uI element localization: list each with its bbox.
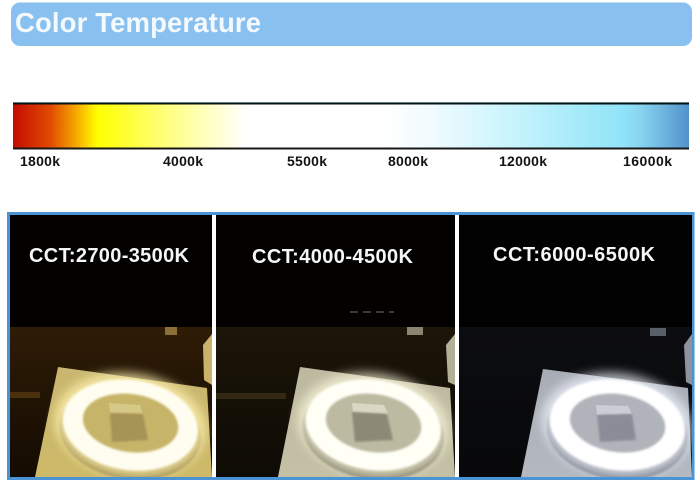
spectrum scale labels: 8000k [388, 153, 428, 169]
CCT label: 6000-6500K: CCT:6000-6500K [493, 244, 656, 266]
title: Color Temperature [15, 7, 261, 38]
color temperature spectrum bar [13, 102, 689, 150]
spectrum scale labels: 5500k [287, 153, 327, 169]
panel: neutral white 4000-4500K [216, 215, 456, 485]
spectrum scale labels: 16000k [623, 153, 672, 169]
panel: warm white 2700-3500K [10, 215, 213, 485]
panel: cool white 6000-6500K [459, 215, 700, 485]
title banner [11, 2, 692, 46]
spectrum scale labels: 12000k [499, 153, 547, 169]
spectrum scale labels: 1800k [20, 153, 60, 169]
CCT label: 4000-4500K: CCT:4000-4500K [252, 246, 414, 268]
photo frame border [8, 214, 693, 478]
CCT label: 2700-3500K: CCT:2700-3500K [29, 245, 190, 267]
spectrum scale labels: 4000k [163, 153, 203, 169]
spectrum scale labels [20, 153, 672, 169]
